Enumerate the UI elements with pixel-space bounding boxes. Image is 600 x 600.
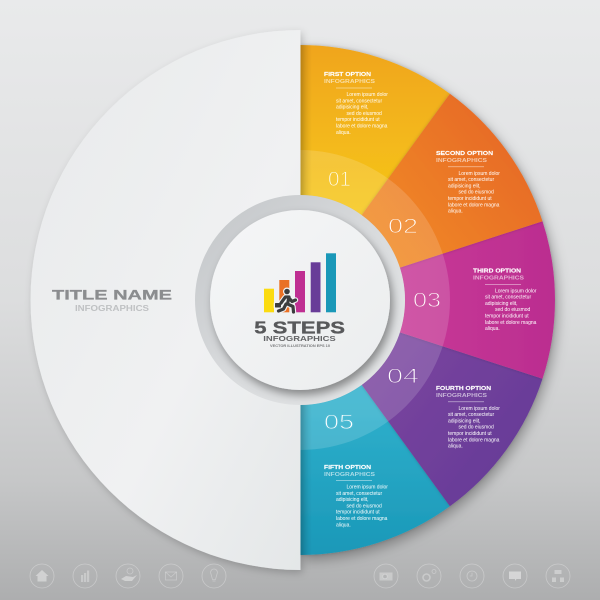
text block: third option: tempor incididunt ut	[485, 314, 529, 320]
icon: running businessman	[274, 288, 296, 312]
segment 2	[362, 94, 542, 268]
text block: first option: Lorem ipsum dolor	[346, 92, 388, 98]
text block: third option	[473, 268, 537, 332]
text block: fifth option: FIFTH OPTION	[324, 465, 371, 471]
segment 5	[300, 385, 450, 555]
text block: first option: aliqua.	[336, 130, 351, 136]
center caption: VECTOR ILLUSTRATION EPS 10	[270, 344, 330, 348]
text block: third option: Lorem ipsum dolor	[495, 288, 537, 294]
icon: home	[30, 564, 54, 588]
segment 1	[300, 45, 450, 215]
text block: fourth option: sed do eiusmod	[458, 425, 494, 431]
center disc	[210, 210, 390, 390]
bar chart icon	[264, 253, 336, 312]
colored five-step wheel	[300, 45, 555, 555]
text block: fifth option	[324, 465, 388, 528]
text block: fifth option: tempor incididunt ut	[336, 510, 380, 516]
icon: clock	[460, 564, 484, 588]
text block: fourth option: adipisicing elit,	[448, 418, 481, 424]
text block: fourth option: INFOGRAPHICS	[436, 393, 487, 399]
icon: hierarchy	[546, 564, 570, 588]
icon: hand with coin	[116, 564, 140, 588]
text block: second option: SECOND OPTION	[436, 151, 493, 157]
icon: gears	[417, 564, 441, 588]
text block: fifth option: labore et dolore magna	[336, 516, 388, 522]
text block: third option: sed do eiusmod	[495, 307, 531, 313]
title block	[52, 286, 172, 313]
text block: second option	[436, 151, 500, 215]
segment 3	[400, 221, 555, 379]
text block: fifth option: INFOGRAPHICS	[324, 472, 375, 478]
icon: mail	[159, 564, 183, 588]
left panel edge shadow on segments	[300, 45, 312, 555]
text block: fifth option: Lorem ipsum dolor	[346, 484, 388, 490]
text block: third option: labore et dolore magna	[485, 320, 537, 326]
text block: second option: Lorem ipsum dolor	[458, 171, 500, 177]
text block: third option: INFOGRAPHICS	[473, 276, 524, 282]
number 04: 04	[387, 364, 419, 388]
text block: second option: tempor incididunt ut	[448, 196, 492, 202]
text block: second option: INFOGRAPHICS	[436, 158, 487, 164]
title: TITLE NAME	[52, 286, 172, 302]
text block: fourth option: tempor incididunt ut	[448, 431, 492, 437]
text block: fourth option	[436, 386, 500, 450]
text block: fifth option: aliqua.	[336, 522, 351, 528]
text block: third option: THIRD OPTION	[473, 268, 521, 274]
text block: fourth option: aliqua.	[448, 444, 463, 450]
footer icons left	[30, 564, 226, 588]
text block: fourth option: sit amet, consectetur	[448, 412, 494, 418]
icon: chart	[73, 564, 97, 588]
text block: first option: FIRST OPTION	[324, 72, 371, 78]
center subheading: INFOGRAPHICS	[263, 336, 336, 343]
text block: first option: INFOGRAPHICS	[324, 79, 375, 85]
text block: third option: aliqua.	[485, 326, 500, 332]
text block: fifth option: adipisicing elit,	[336, 497, 369, 503]
number 02: 02	[388, 214, 418, 238]
text block: third option: adipisicing elit,	[485, 301, 518, 307]
center ring	[195, 195, 405, 405]
center heading: 5 steps: 5 STEPS	[254, 317, 345, 337]
footer icons right	[374, 564, 570, 588]
number 01: 01	[328, 167, 351, 191]
icon: speech bubble	[503, 564, 527, 588]
text block: second option: aliqua.	[448, 209, 463, 215]
left half panel	[30, 30, 300, 570]
text block: second option: sed do eiusmod	[458, 190, 494, 196]
segment 4	[362, 332, 542, 506]
text block: third option: sit amet, consectetur	[485, 295, 531, 301]
number 03: 03	[413, 288, 441, 312]
text block: second option: adipisicing elit,	[448, 183, 481, 189]
number 05: 05	[324, 410, 354, 434]
text block: first option: sit amet, consectetur	[336, 98, 382, 104]
icon: light bulb	[202, 564, 226, 588]
text block: first option: adipisicing elit,	[336, 105, 369, 111]
text block: first option: labore et dolore magna	[336, 124, 388, 130]
text block: second option: sit amet, consectetur	[448, 177, 494, 183]
text block: first option: sed do eiusmod	[346, 111, 382, 117]
icon: camera	[374, 564, 398, 588]
light inner band over segments	[300, 150, 450, 450]
text block: first option: tempor incididunt ut	[336, 117, 380, 123]
text block: first option	[324, 72, 388, 136]
text block: fourth option: Lorem ipsum dolor	[458, 406, 500, 412]
text block: fifth option: sit amet, consectetur	[336, 491, 382, 497]
text block: fourth option: FOURTH OPTION	[436, 386, 491, 392]
text block: second option: labore et dolore magna	[448, 202, 500, 208]
text block: fourth option: labore et dolore magna	[448, 437, 500, 443]
text block: fifth option: sed do eiusmod	[346, 503, 382, 509]
subtitle: INFOGRAPHICS	[75, 304, 150, 313]
